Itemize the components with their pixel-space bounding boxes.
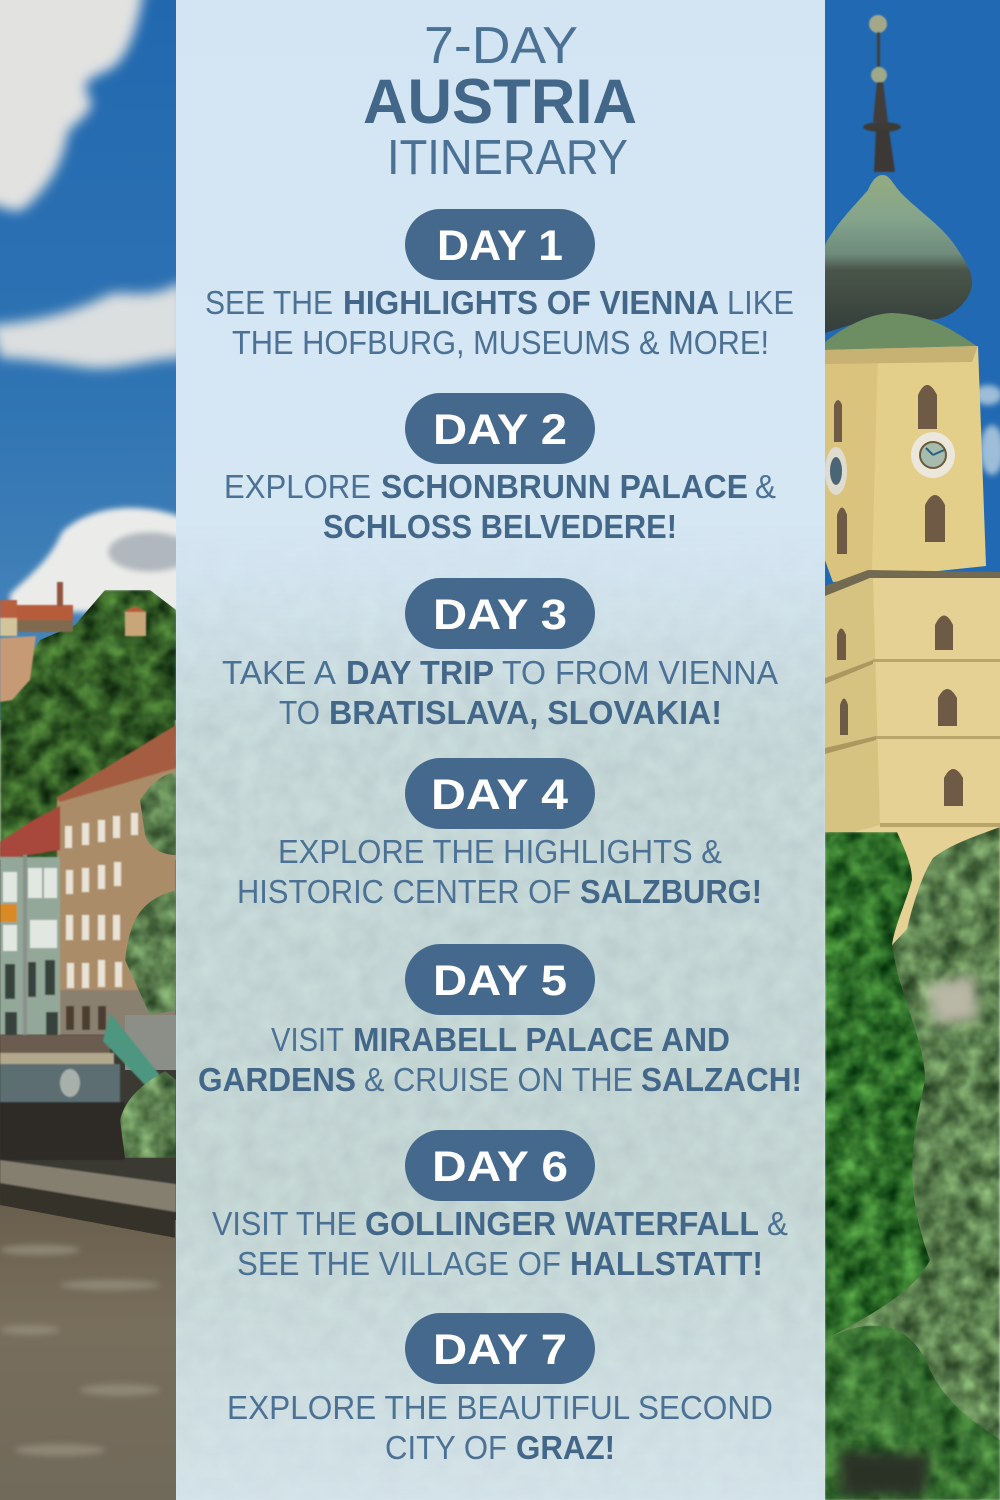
tree below stairs [120, 1071, 176, 1158]
spire [863, 15, 901, 172]
title [363, 17, 637, 185]
day 3 description: BRATISLAVA, SLOVAKIA! [329, 694, 722, 731]
day 3 description [222, 654, 778, 731]
side clock [825, 447, 847, 495]
green building [0, 806, 60, 1050]
day 3 description: TO [279, 694, 320, 731]
day 3 description: TAKE A [222, 654, 336, 691]
belfry windows [834, 385, 945, 554]
day 6 description [212, 1205, 788, 1282]
onion dome [825, 175, 972, 333]
upper tower [825, 346, 986, 582]
stair structure behind ramp [125, 1015, 176, 1070]
faint foliage through panel [176, 520, 825, 1500]
foliage base shadow [840, 1450, 930, 1496]
left sky [0, 0, 176, 720]
day 1 description: THE HOFBURG, MUSEUMS & MORE! [232, 324, 769, 361]
photo: right strip, church tower [825, 0, 1000, 1500]
lower foliage [825, 1326, 1000, 1500]
title line: ITINERARY: ITINERARY [387, 131, 628, 185]
wooded hillside [0, 590, 176, 870]
day 3 pill: DAY 3 [433, 591, 567, 639]
castle on hill [0, 582, 147, 702]
upper tower cornice [825, 346, 978, 364]
lower windows [837, 616, 963, 806]
day 2 block [224, 393, 776, 545]
lower cloud [10, 508, 192, 612]
day 5 block [198, 944, 802, 1098]
day 5 description [198, 1021, 802, 1098]
trees by the building [125, 772, 176, 1015]
day 2 description [224, 468, 776, 545]
day 2 pill [405, 393, 595, 464]
day 6 description: HALLSTATT! [570, 1245, 763, 1282]
small clouds [980, 381, 1000, 478]
day 4 pill [405, 758, 595, 829]
photo: left strip, Graz riverside [0, 0, 192, 1500]
day 4 description: SALZBURG! [580, 873, 762, 910]
dome collar [825, 313, 978, 352]
river walkway [0, 1160, 176, 1240]
day 6 pill: DAY 6 [432, 1143, 568, 1191]
title line: 7-DAY: 7-DAY [424, 17, 578, 75]
day 4 description [237, 833, 762, 910]
foliage right, pale tree [825, 827, 1000, 1500]
day 2 description: SCHLOSS BELVEDERE! [323, 508, 677, 545]
day 6 description: & [767, 1205, 788, 1242]
lower tower left shade [825, 578, 880, 840]
brown apartment building [56, 725, 176, 1035]
lower tower [825, 572, 1000, 960]
clock face [911, 432, 955, 478]
day 6 description: SEE THE VILLAGE OF [237, 1245, 561, 1282]
day 3 pill [405, 578, 595, 649]
day 1 description: LIKE [727, 284, 794, 321]
top-left cloud [0, 0, 145, 211]
day 1 pill [405, 209, 595, 280]
day 4 description: HISTORIC CENTER OF [237, 873, 571, 910]
day 5 pill [405, 944, 595, 1015]
tower cornices [825, 570, 1000, 827]
day 3 block [222, 578, 778, 731]
day 6 description: VISIT THE [212, 1205, 357, 1242]
day 5 description: GARDENS [198, 1061, 356, 1098]
day 4 pill: DAY 4 [431, 771, 568, 819]
day 5 description: MIRABELL PALACE AND [353, 1021, 730, 1058]
title line: AUSTRIA: AUSTRIA [363, 67, 637, 137]
day 2 pill: DAY 2 [433, 406, 567, 454]
day 7 description: EXPLORE THE BEAUTIFUL SECOND [227, 1389, 773, 1426]
day 1 description [205, 284, 794, 361]
day 1 description: HIGHLIGHTS OF VIENNA [343, 284, 719, 321]
day 3 description: DAY TRIP [346, 654, 494, 691]
day 2 description: & [755, 468, 776, 505]
day 6 pill [405, 1130, 595, 1201]
upper tower left shade [825, 350, 878, 582]
base behind buildings [0, 860, 176, 1220]
foliage left, dark tree [825, 832, 930, 1340]
right sky [825, 0, 1000, 620]
day 3 description: TO FROM VIENNA [502, 654, 778, 691]
day 5 description: & CRUISE ON THE [364, 1061, 633, 1098]
day 6 description: GOLLINGER WATERFALL [365, 1205, 759, 1242]
day 5 description: VISIT [271, 1021, 344, 1058]
day 6 block [212, 1130, 788, 1282]
day 5 pill: DAY 5 [433, 957, 567, 1005]
middle cloud [0, 280, 185, 368]
day 4 block [237, 758, 762, 910]
day 7 block [227, 1313, 773, 1466]
river ripples [0, 1245, 160, 1456]
day 2 description: EXPLORE [224, 468, 371, 505]
day 2 description: SCHONBRUNN PALACE [381, 468, 748, 505]
day 7 pill: DAY 7 [433, 1326, 567, 1374]
panel base [176, 0, 825, 1500]
day 5 description: SALZACH! [641, 1061, 802, 1098]
day 7 description: GRAZ! [516, 1429, 615, 1466]
day 7 pill [405, 1313, 595, 1384]
day 1 pill: DAY 1 [437, 222, 563, 270]
panel: translucent itinerary column [176, 0, 825, 1500]
bridge [0, 1013, 163, 1160]
tower patch through leaves [925, 975, 978, 1025]
day 1 block [205, 209, 794, 361]
river [0, 1205, 176, 1500]
day 7 description [227, 1389, 773, 1466]
day 4 description: EXPLORE THE HIGHLIGHTS & [278, 833, 722, 870]
day 7 description: CITY OF [385, 1429, 507, 1466]
day 1 description: SEE THE [205, 284, 333, 321]
